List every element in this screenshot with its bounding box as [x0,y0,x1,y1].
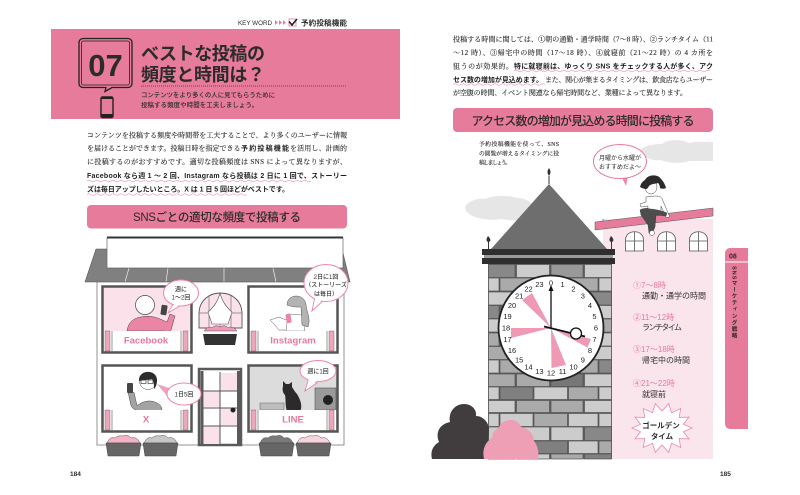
text block: right body: 狙うのが効果的。 [453,62,513,70]
bushes [431,404,538,459]
window: Facebook [102,286,192,352]
side tab [725,248,748,429]
person: Facebook user [127,296,175,332]
title text: 頻度と時間は？ [141,65,265,85]
icon: black cat [283,381,301,411]
window: LINE: LINE [282,414,304,426]
keyword line: 予約投稿機能 [301,18,347,28]
text block: right body: セス数の増加が見込めます。 [453,75,543,84]
clock numbers: 12 [547,368,555,378]
text block: left body: を活用し、計画的 [290,144,347,152]
time list: ランチタイム [642,323,682,332]
side tab: 08 [729,254,737,260]
window: Instagram [248,286,338,352]
pink building [595,208,713,459]
callout: Facebook frequency: 週に [175,286,187,294]
time list: ①7〜8時 [633,281,666,290]
illustration: clock tower [482,168,615,459]
callout: X frequency [157,383,201,405]
tower roof [491,184,607,249]
text block: left body: ズは毎日アップしたいところ。X は 1 日 5 回ほどがベストです。 [87,184,289,194]
text block: left body: を届けることができます。投稿日時を指定できる [87,144,240,152]
clock numbers: 16 [508,346,516,355]
clock numbers: 8 [588,346,592,355]
text block: left body: 予約投稿機能 [241,144,289,152]
side tab: SNSマーケティング戦略 [730,266,737,339]
banner: access times [453,108,713,132]
callout: Facebook frequency [164,280,198,313]
planter boxes [106,435,331,456]
clock hands [544,285,585,339]
icon: smartphone [101,97,113,118]
keyword line [238,18,347,28]
starburst: golden time: ゴールデン [642,420,680,430]
page number: 184: 184 [70,471,81,478]
clouds [465,140,713,220]
text block: right body: が空腹の時間、イベント関連なら帰宅時間など、業種によって異なります。 [453,88,687,97]
subtitle: コンテンツをより多くの人に見てもらうために [141,90,275,99]
window: LINE [248,366,338,432]
banner: SNS frequency: SNSごとの適切な頻度で投稿する [133,210,301,224]
clock numbers: 4 [588,301,592,310]
starburst: golden time: タイム [651,431,674,441]
text block: right body: また、関心が集まるタイミングは、飲食店ならユーザー [545,75,713,84]
note text: 予約投稿機能を使って、SNS [479,140,559,148]
note text [479,140,559,166]
time list: ②11〜12時 [633,313,674,322]
panel: title header [51,29,400,119]
text block: right body: 〜12 時）、③帰宅中の時間（17〜18 時）、④就寝前（21〜22 時）の 4 カ所を [453,48,713,57]
callout: Monday to Wednesday: おすすめだよ〜 [599,164,641,171]
text block: left body [87,130,347,195]
clock numbers: 23 [535,280,544,289]
note text: 稿しましょう。 [479,158,511,166]
note text: の閲覧が増えるタイミングに投 [479,150,559,158]
clock numbers: 19 [503,312,512,321]
text block: right body [453,34,713,97]
callout: Monday to Wednesday: 月曜から水曜が [599,154,641,162]
text block: left body: Facebook なら週 1 〜 2 回、Instagram なら投稿は 2 日に 1 回で、ストーリー [87,171,347,180]
clock numbers: 14 [524,362,533,372]
window: Instagram: Instagram [270,336,316,346]
clock numbers: 22 [524,284,533,294]
time list: ④21〜22時 [633,379,675,388]
illustration: house [85,236,350,456]
title text: ベストな投稿の [141,44,265,64]
window: X: X [143,414,150,426]
callout: LINE frequency: 週に1回 [307,368,329,376]
callout: LINE frequency [300,360,336,391]
clock numbers: 15 [515,355,523,364]
banner: SNS frequency [87,205,347,228]
clock numbers: 2 [571,284,576,294]
callout: Instagram frequency [304,264,348,311]
clock numbers: 5 [592,312,597,321]
title text [141,44,265,85]
time list: 通勤・通学の時間 [642,290,706,300]
window: X [102,366,192,432]
roof [85,249,350,282]
window: Facebook: Facebook [124,336,169,346]
clock numbers: 21 [515,292,523,301]
icon: number speech box [79,38,132,92]
page number: 185: 185 [720,471,731,478]
bricks [488,264,612,459]
callout: X frequency: 1日5回 [175,392,193,398]
text block: right body: 特に就寝前は、ゆっくり SNS をチェックする人が多く、アク [514,62,713,70]
arched window with planter [199,293,242,345]
text block: left body: に投稿するのがおすすめです。適切な投稿頻度は SNS によって異なりますが、 [87,157,347,166]
cornice [482,249,615,255]
clock numbers [502,278,598,378]
wall [97,282,344,445]
clock numbers: 3 [581,292,585,301]
clock numbers: 9 [581,355,585,364]
clock numbers: 13 [535,367,544,376]
callout: Instagram frequency: （ストーリーズ [305,281,347,289]
subtitle [141,90,275,109]
clock numbers: 1 [561,280,565,289]
callout: Instagram frequency: は毎日） [314,290,338,298]
time list: 帰宅中の時間 [642,355,690,365]
clock numbers: 10 [569,362,578,372]
clock numbers: 0 [549,278,553,288]
time list: ③17〜18時 [633,345,675,354]
highlighted time wedges [511,293,591,368]
sign board [107,236,343,268]
person: woman on roof [640,175,669,236]
person: X user [127,372,162,410]
clock [498,276,604,380]
icon: number speech box: 07 [88,48,123,83]
banner: access times: アクセス数の増加が見込める時間に投稿する [472,113,694,128]
door [199,369,241,445]
clock numbers: 18 [502,324,510,332]
clock numbers: 7 [592,335,597,344]
clock numbers: 11 [559,367,566,376]
callout: Monday to Wednesday [594,144,646,186]
clock numbers: 6 [594,324,598,332]
subtitle: 投稿する頻度や時間を工夫しましょう。 [141,100,258,109]
time list [633,281,706,399]
text block: right body: 投稿する時間に関しては、①朝の通勤・通学時間（7〜8 時）、②ランチタイム（11 [453,34,713,44]
person: Instagram user [270,296,309,331]
keyword line: KEY WORD [238,20,272,27]
clock numbers: 17 [503,335,512,344]
text block: left body: コンテンツを投稿する頻度や時間帯を工夫することで、より多くのユーザーに情報 [87,130,347,140]
clock numbers: 20 [508,301,516,310]
starburst: golden time [632,404,692,452]
callout: Instagram frequency: 2日に1回 [314,274,338,281]
callout: Facebook frequency: 1〜2回 [172,294,190,302]
time list: 就寝前 [642,389,666,399]
